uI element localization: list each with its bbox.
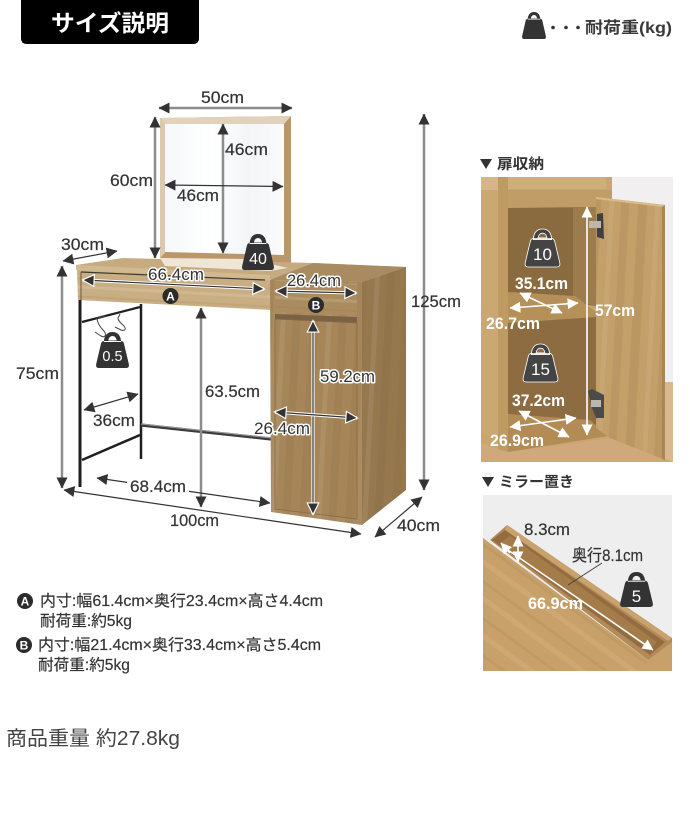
- dimension: total depth 40cm: [375, 497, 440, 537]
- notes: drawer A: [17, 592, 323, 630]
- black metal frame: [80, 300, 271, 487]
- dimension: inner mirror height 46cm: [223, 124, 268, 253]
- dimension: drawer B width 26.4cm: [276, 272, 356, 293]
- dimension: knee depth 36cm: 36cm: [93, 412, 135, 430]
- heading: size description: サイズ説明: [51, 10, 169, 36]
- dimension: door width 26.4cm: [254, 412, 357, 438]
- notes: drawer B: B: [20, 638, 29, 652]
- mirror slot: [490, 525, 672, 660]
- dimension: mirror width 50cm: [159, 89, 292, 108]
- dimension: lower shelf 37.2cm: [512, 392, 569, 437]
- dimension: total height 125cm: 125cm: [411, 293, 461, 311]
- lower compartment: [508, 317, 596, 430]
- dimension: door width 26.4cm: 26.4cm: [254, 420, 310, 438]
- cabinet carcass: [481, 177, 612, 452]
- dimension: drawer A width 66.4cm: [83, 266, 264, 289]
- dimension: knee width 68.4cm: [97, 475, 270, 503]
- legend: load capacity: [522, 12, 672, 39]
- heading: size description: [21, 0, 199, 44]
- icon: load 0.5kg: 0.5: [102, 349, 123, 365]
- panel: mirror holder photo: [483, 495, 672, 671]
- dimension: slot height 8.3cm: 8.3cm: [524, 521, 570, 539]
- dimension: door height 59.2cm: 59.2cm: [320, 368, 375, 386]
- dimension: knee depth 36cm: [84, 394, 138, 430]
- badge: A: [162, 288, 178, 304]
- wood desk surface: [483, 538, 672, 671]
- dimension: slot width 66.9cm: 66.9cm: [528, 595, 583, 613]
- upper compartment: [508, 207, 596, 306]
- heading: door storage: 扉収納: [497, 156, 544, 173]
- shelf: [508, 292, 596, 323]
- dimension: total width 100cm: [64, 490, 361, 534]
- icon: load 40kg: [242, 234, 274, 270]
- dimension: drawer B width 26.4cm: 26.4cm: [287, 272, 341, 290]
- dimension: lower shelf 26.9cm: 26.9cm: [490, 432, 544, 450]
- dimension: upper shelf 35.1cm: [515, 275, 568, 313]
- dressing table top: [76, 258, 406, 282]
- icon: load 10kg: [525, 229, 560, 267]
- heading: door storage: [480, 156, 544, 173]
- icon: load 15kg: [523, 344, 558, 382]
- dimension: knee height 63.5cm: 63.5cm: [205, 383, 260, 401]
- mirror: [160, 116, 291, 263]
- open door: [596, 197, 665, 460]
- storage cabinet: [270, 267, 406, 525]
- dimension: depth 30cm: [61, 236, 117, 261]
- dimension: upper shelf 26.7cm: 26.7cm: [486, 315, 540, 333]
- dimension: upper shelf 26.7cm: [486, 303, 578, 333]
- notes: drawer A: 耐荷重:約5kg: [40, 612, 132, 630]
- dimension: slot height 8.3cm: [518, 521, 570, 562]
- dimension: desk height 75cm: 75cm: [16, 365, 59, 383]
- icon: load 15kg: 15: [531, 360, 550, 379]
- panel: dressing table diagram: [16, 89, 461, 537]
- dimension: inner mirror height 46cm: 46cm: [225, 141, 268, 159]
- icon: load 5kg: 5: [632, 587, 641, 606]
- product weight: 商品重量 約27.8kg: [6, 727, 180, 750]
- icon: load 0.5kg: [96, 332, 129, 368]
- notes: drawer B: 耐荷重:約5kg: [38, 656, 130, 674]
- notes: drawer A: 内寸:幅61.4cm×奥行23.4cm×高さ4.4cm: [40, 592, 323, 610]
- legend: load capacity: 耐荷重(kg): [585, 19, 672, 37]
- dimension: lower shelf 37.2cm: 37.2cm: [512, 392, 565, 410]
- icon: load 10kg: 10: [533, 245, 552, 264]
- dimension: inner mirror width 46cm: [165, 185, 283, 205]
- badge: A: A: [166, 290, 175, 304]
- dimension: inner mirror width 46cm: 46cm: [177, 187, 219, 205]
- notes: drawer B: [16, 636, 321, 674]
- dimension: lower shelf 26.9cm: [490, 418, 576, 450]
- dimension: upper shelf 35.1cm: 35.1cm: [515, 275, 568, 293]
- dimension: slot width 66.9cm: [501, 543, 653, 650]
- dimension: door storage height 57cm: 57cm: [595, 302, 635, 320]
- panel: door storage photo: [481, 177, 673, 462]
- dimension: drawer A width 66.4cm: 66.4cm: [148, 266, 204, 284]
- dimension: mirror height 60cm: 60cm: [110, 172, 153, 190]
- S hooks: [95, 314, 125, 337]
- dimension: total width 100cm: 100cm: [170, 512, 219, 530]
- dimension: slot depth 8.1cm: 奥行8.1cm: [572, 546, 643, 565]
- icon: load 40kg: 40: [249, 251, 267, 268]
- dimension: mirror width 50cm: 50cm: [201, 89, 244, 107]
- dimension: knee width 68.4cm: 68.4cm: [130, 478, 186, 496]
- badge: B: [308, 297, 324, 313]
- heading: mirror holder: ミラー置き: [499, 474, 574, 491]
- icon: load 5kg: [620, 572, 653, 607]
- notes: drawer B: 内寸:幅21.4cm×奥行33.4cm×高さ5.4cm: [38, 636, 321, 654]
- notes: drawer A: A: [21, 594, 30, 608]
- dimension: depth 30cm: 30cm: [61, 236, 104, 254]
- dimension: total depth 40cm: 40cm: [397, 517, 440, 535]
- badge: B: B: [312, 298, 321, 312]
- hinges: [588, 213, 604, 418]
- left desk drawer front: [77, 269, 271, 310]
- dimension: slot depth 8.1cm: [568, 546, 643, 585]
